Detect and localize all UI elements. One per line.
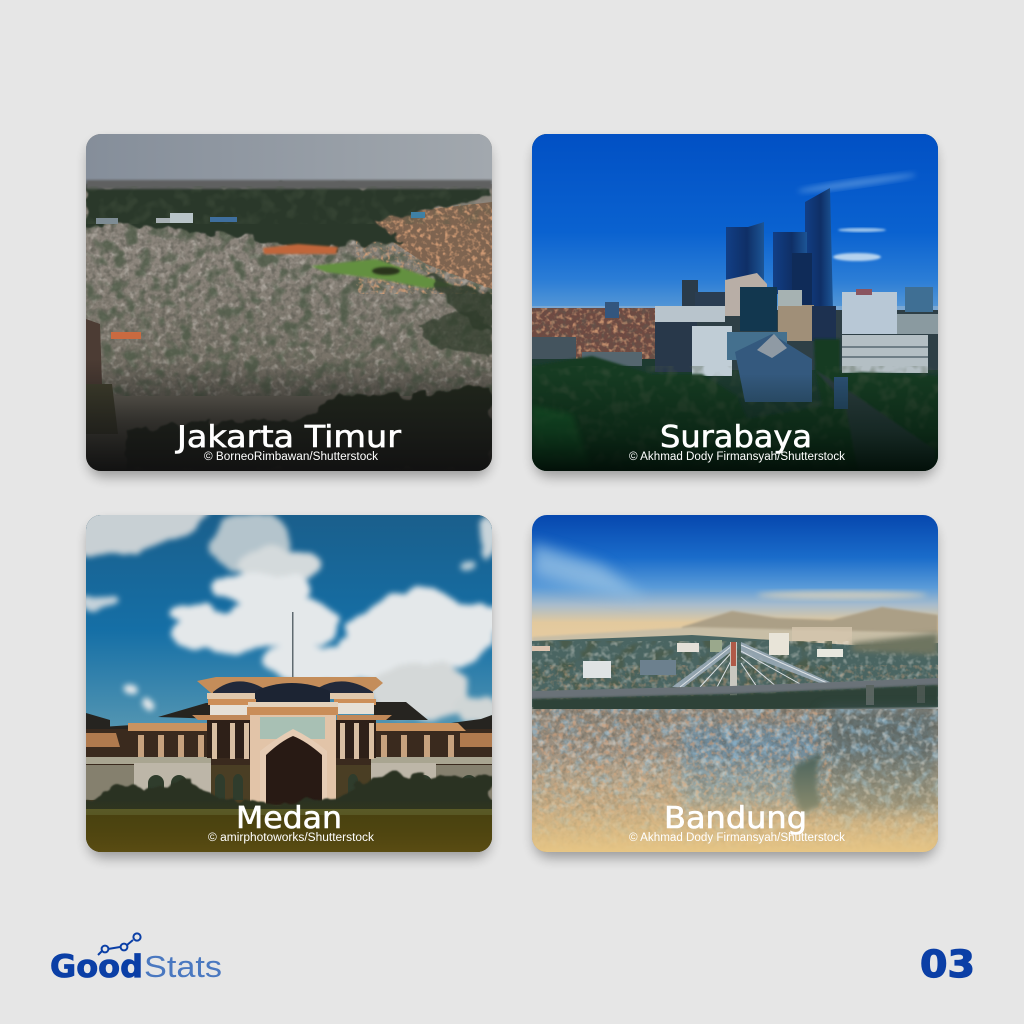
photo credit: © Akhmad Dody Firmansyah/Shutterstock [629,451,845,463]
cloud shapes [86,515,492,723]
panel: Jakarta Timur [86,134,492,477]
title: Bandung: Bandung [664,801,807,836]
wing column row [138,735,144,757]
panel: Surabaya [532,134,938,477]
logo: GoodStats [50,933,222,985]
logo chart line icon [98,933,141,955]
palace top roof strip [197,677,383,693]
photo: Surabaya skyline [532,134,938,471]
photo: Maimun Palace, Medan [86,515,492,852]
panel: Medan [66,495,506,858]
lower arches [148,774,477,800]
page number: 03 [920,943,975,986]
title: Surabaya: Surabaya [660,420,812,455]
photo: Bandung cityscape and Pasupati bridge [532,515,938,852]
central columns [212,723,217,759]
photo credit: © amirphotoworks/Shutterstock [208,832,374,844]
photo: aerial view of Jakarta Timur [86,134,492,471]
logo wordmark bold: Good [50,949,143,985]
photo credit: © Akhmad Dody Firmansyah/Shutterstock [629,832,845,844]
title: Jakarta Timur: Jakarta Timur [175,420,402,455]
panel: Bandung [532,515,938,858]
photo credit: © BorneoRimbawan/Shutterstock [204,451,378,463]
logo wordmark light: Stats [144,949,222,984]
title: Medan: Medan [236,801,342,836]
